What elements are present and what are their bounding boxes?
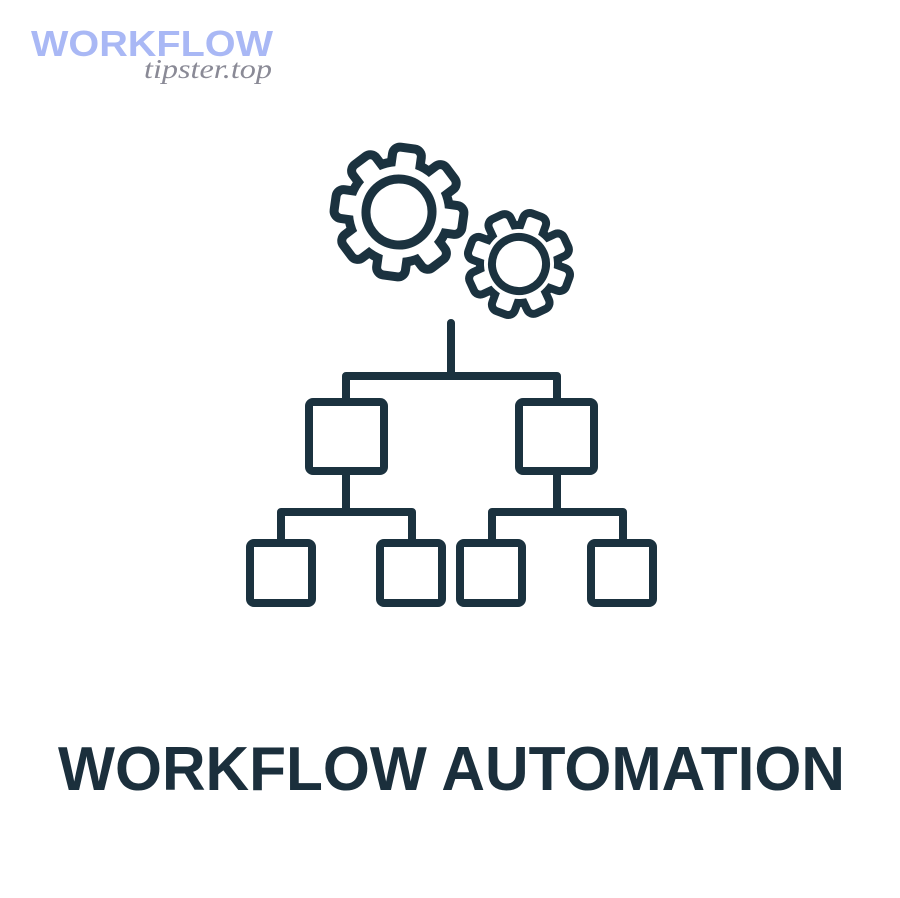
hierarchy tree diagram [250,323,653,603]
icon: large gear [331,144,467,280]
title: WORKFLOW AUTOMATION [58,735,845,804]
logo watermark [31,24,273,84]
logo text: tipster.top: tipster.top [144,54,272,84]
icon: small gear [457,202,581,326]
logo text: WORKFLOW: WORKFLOW [31,24,273,64]
